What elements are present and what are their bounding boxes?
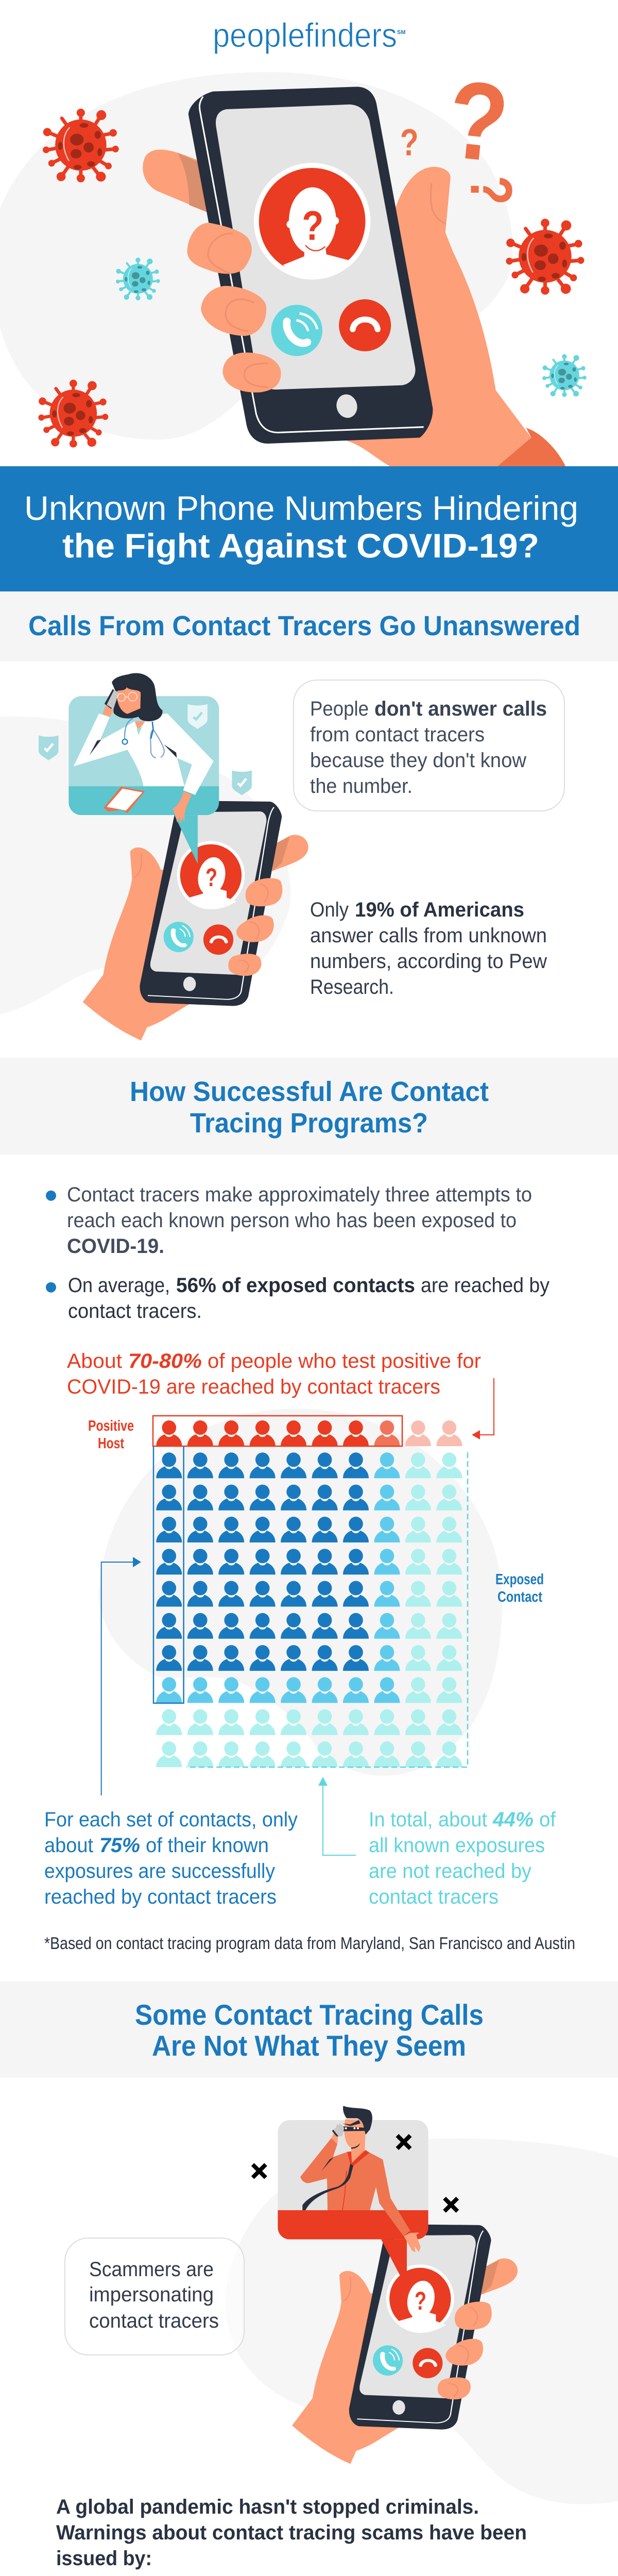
blue column outline [153,1446,184,1703]
text block: 19 percent of Americans [310,899,547,998]
text block: 44 percent: are not reached by [369,1860,531,1883]
section heading: not what they seem: Are Not What They Seem [152,2029,466,2062]
icon: shield left [39,735,59,760]
label: exposed contact [495,1571,544,1605]
title text: Unknown Phone Numbers Hindering [24,489,578,527]
section heading: calls go unanswered: Calls From Contact Tracers Go Unanswered [28,611,580,641]
doctor figure [74,673,214,824]
illustration: doctor card [39,673,252,864]
row: positive hosts [156,1420,462,1446]
label: positive host: Positive [88,1418,134,1434]
callout: people don't answer: don't answer calls [374,698,547,720]
text block: 75 percent: exposures are successfully [44,1860,275,1883]
bullet: 56 percent reached: contact tracers. [68,1300,202,1323]
arrow: red to host row [472,1378,494,1439]
label: positive host: Host [98,1435,124,1452]
callout: 70-80 percent: COVID-19 are reached by contact tracers [67,1376,440,1398]
bullet: three attempts [46,1183,532,1258]
section heading: not what they seem [0,1981,618,2078]
section heading: calls go unanswered [0,591,618,662]
callout: 70-80 percent [67,1350,481,1398]
text block: global pandemic: Warnings about contact tracing scams have been [56,2521,527,2544]
callout: 70-80 percent: of people who test positive for [208,1350,481,1372]
icon: Department of Justice seal [0,0,455,2576]
section heading: how successful: Tracing Programs? [190,1108,428,1139]
scammer figure [300,2106,421,2252]
bullet: three attempts: Contact tracers make approximately three attempts to [67,1183,532,1206]
callout: scammers: contact tracers [89,2310,219,2332]
tablet [104,787,145,813]
arrow: aqua to unreached [318,1777,356,1855]
dashed not-reached outline [186,1452,468,1767]
hand and phone [143,87,565,466]
text block: 75 percent: 75% [99,1834,140,1857]
callout: scammers: Scammers are [89,2258,214,2281]
title banner [0,466,618,591]
callout: people don't answer: the number. [310,775,413,798]
icon: large question mark: ? [442,57,514,186]
text block: global pandemic: issued by: [56,2547,152,2570]
callout: scammers: impersonating [89,2283,214,2306]
text block: 44 percent: all known exposures [369,1834,545,1857]
icon: question mark on caller avatar: ? [302,202,323,249]
callout: people don't answer: because they don't know [310,749,526,772]
text block: 44 percent: In total, about [369,1808,487,1831]
text block: global pandemic: A global pandemic hasn't stopped criminals. [56,2496,479,2518]
icon: shield in card [187,704,208,729]
label: exposed contact: Exposed [495,1571,544,1588]
title text [24,489,578,565]
icon: shield right [232,770,252,795]
text block: 19 percent of Americans: answer calls from unknown [310,924,547,947]
text block: 19 percent of Americans: Research. [310,976,394,998]
hero illustration [0,57,586,466]
icon: x mark right [444,2198,457,2211]
section heading: how successful: How Successful Are Contact [130,1076,489,1107]
label: positive host [88,1418,134,1452]
text block: 75 percent: about [44,1834,93,1857]
section heading: how successful [0,1058,618,1155]
bullet: 56 percent reached: are reached by [421,1274,550,1297]
text block: 75 percent: reached by contact tracers [44,1886,277,1908]
logo: peoplefinders top: SM [397,29,406,36]
text block: 75 percent: of their known [146,1834,269,1857]
illustration: hand holding phone with blob [0,716,308,1041]
bullet: 56 percent reached: On average, [68,1274,170,1297]
callout: people don't answer: People [310,698,369,720]
illustration: hand holding phone with blob, scam section [226,2139,618,2504]
icon: virus teal right [543,355,586,396]
illustration: scammer card [253,2106,457,2276]
text block: 44 percent [369,1808,556,1908]
text block: 44 percent: 44% [492,1808,534,1831]
bullet: three attempts: COVID-19. [67,1235,164,1258]
icon: question mark on small phone: ? [205,863,217,892]
icon: virus red right [508,221,582,293]
text block: 44 percent: of [539,1808,556,1831]
icon: sideways question mark: ? [458,176,525,205]
icon: x mark top [397,2136,410,2148]
icon: x mark left [253,2164,266,2178]
red host outline [153,1416,402,1446]
logo: peoplefinders top: peoplefinders [213,16,397,54]
text block: global pandemic [56,2496,527,2570]
text block: 19 percent of Americans: Only [310,899,349,921]
label: exposed contact: Contact [497,1589,542,1605]
bullet: 56 percent reached [46,1274,550,1323]
bullet: 56 percent reached: 56% of exposed contacts [176,1274,415,1297]
bullet: three attempts: reach each known person who has been exposed to [67,1209,517,1232]
icon: virus teal left [117,259,159,299]
people grid chart [98,1409,502,1776]
text block: 44 percent: contact tracers [369,1886,499,1908]
rows: not reached [156,1709,462,1767]
icon: virus red bottom left [40,381,107,446]
callout: 70-80 percent: 70-80% [128,1350,202,1372]
arrow: blue to column [101,1557,141,1795]
text block: 19 percent of Americans: 19% of Americans [355,899,524,921]
rows: exposed contacts reached [156,1452,462,1671]
title text: the Fight Against COVID-19? [62,527,539,565]
section heading: not what they seem: Some Contact Tracing Calls [135,1998,484,2031]
callout: 70-80 percent: About [67,1350,122,1372]
text block: 75 percent: For each set of contacts, only [44,1808,298,1831]
callout: people don't answer: from contact tracers [310,723,485,746]
text block: 19 percent of Americans: numbers, according to Pew [310,950,547,973]
icon: question mark on scam phone: ? [415,2286,426,2315]
text block: 75 percent [44,1808,298,1908]
callout: scammers [65,2238,244,2355]
row: partially reached [156,1677,462,1703]
icon: small question mark: ? [400,122,419,164]
callout: people don't answer [294,680,564,811]
icon: virus red top left [44,110,117,181]
